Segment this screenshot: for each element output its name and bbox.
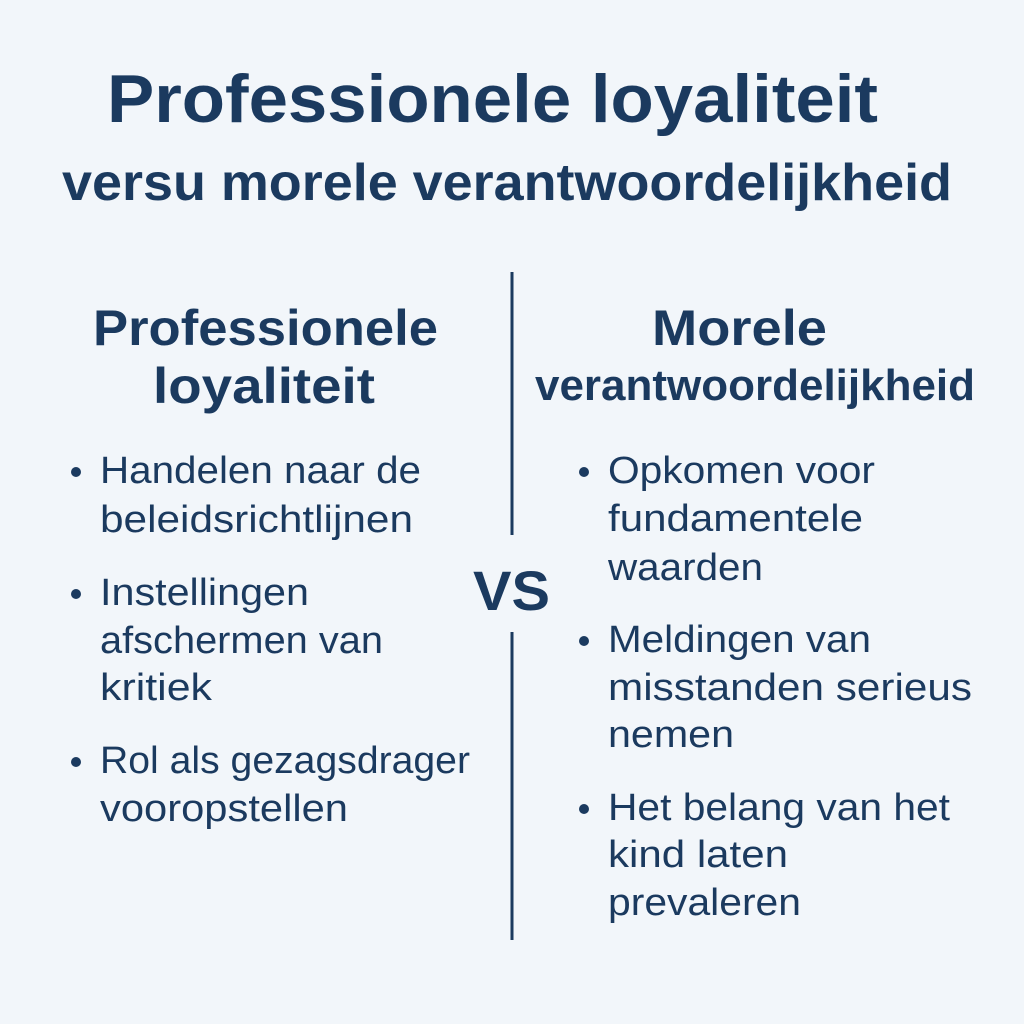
bullet list left: Instellingen [100,572,309,614]
divider [510,272,514,940]
heading left: loyaliteit [153,358,375,414]
bullet list right: nemen [608,714,734,756]
vs label: VS [473,559,550,622]
panel: professionele loyaliteit [71,300,470,830]
bullet list right: fundamentele [608,498,863,540]
heading right: Morele [652,300,827,356]
bullet list left: kritiek [100,667,213,709]
bullet list right: prevaleren [608,882,801,924]
bullet list left [71,450,470,830]
bullet list right: Opkomen voor [608,450,875,492]
bullet list left: afschermen van [100,620,383,662]
bullet list right: Meldingen van [608,619,871,661]
bullet list left: Handelen naar de [100,450,421,492]
bullet list right: kind laten [608,834,788,876]
title [62,61,952,212]
heading left [93,300,438,414]
bullet list right: Het belang van het [608,787,950,829]
bullet list left: beleidsrichtlijnen [100,499,413,541]
heading right: verantwoordelijkheid [535,361,975,410]
bullet list right: waarden [607,547,763,589]
bullet list right [579,450,972,924]
bullet list left: Rol als gezagsdrager [100,740,470,782]
bullet list right: misstanden serieus [608,667,972,709]
panel: morele verantwoordelijkheid [535,300,975,924]
heading right [535,300,975,410]
title: Professionele loyaliteit [107,61,878,137]
title: versu morele verantwoordelijkheid [62,154,952,212]
bullet list left: vooropstellen [100,788,348,830]
heading left: Professionele [93,300,438,356]
